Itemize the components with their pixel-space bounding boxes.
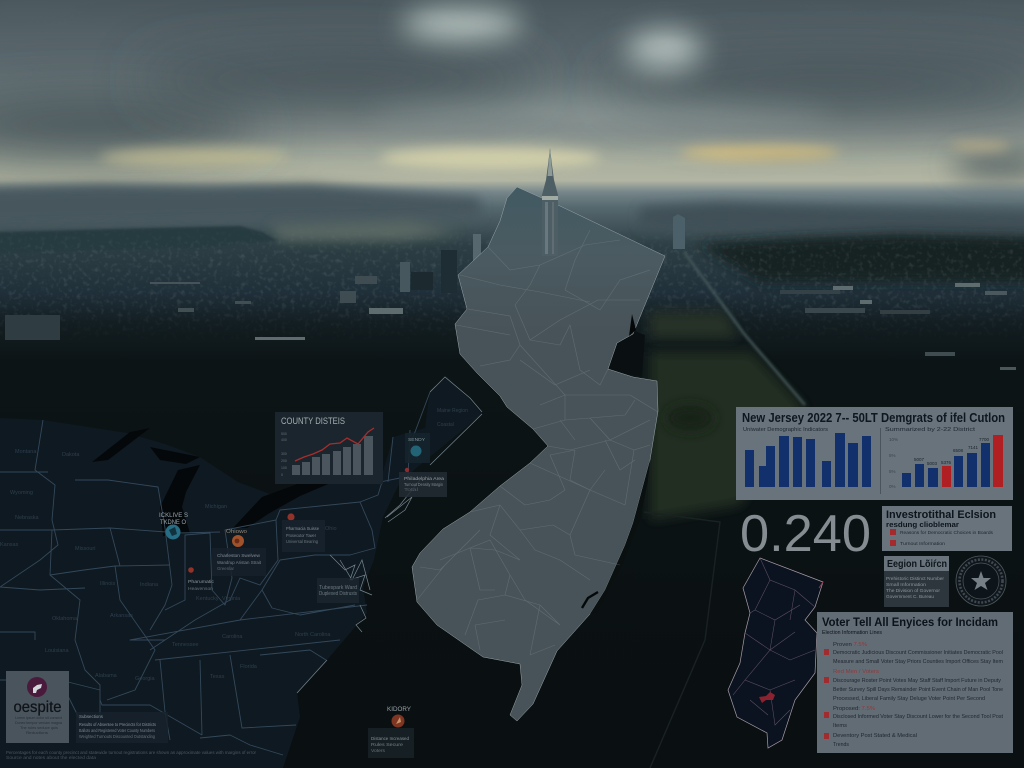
panel: respite logo — [6, 671, 69, 743]
small Maine labels: Coastal — [437, 422, 454, 428]
voter list text: Discourage Roster Point Votes May Staff Staff Import Future in Deputy — [833, 678, 1001, 684]
faint state labels: Montana — [15, 449, 37, 455]
chart divider — [879, 428, 882, 494]
city and fields — [0, 242, 1024, 328]
right chart value labels: 5003 — [927, 461, 938, 466]
map marker and callout: offshore: Distance Increased — [371, 736, 409, 741]
panel: demographics bar charts — [736, 407, 1013, 500]
callout: northeast note — [399, 472, 447, 497]
US regional map, dark navy: Source and notes about the elected data — [6, 755, 96, 761]
voter list text: Measure and Small Voter Stay Priors Counties Import Offices Stay Item — [833, 659, 1003, 665]
map marker and callout: Pennsylvania: Prosecutor Tower — [286, 533, 316, 538]
faint state labels: Alabama — [95, 673, 118, 679]
panel: region legend — [884, 556, 949, 607]
panel: county chart — [275, 412, 383, 484]
right chart value labels: 5% — [889, 453, 896, 458]
right chart value labels: 6508 — [953, 448, 964, 453]
map marker: Ohio — [226, 529, 247, 547]
voter list text: Trends — [833, 742, 849, 748]
faint state labels: Ohio — [325, 526, 337, 532]
footer note: Percentages for each county precinct and statewide turnout registrations are shown as approximate values with margins of error — [6, 750, 256, 756]
faint state labels: Nebraska — [15, 515, 39, 521]
map marker and callout: offshore — [368, 707, 414, 758]
callout: Virginia note — [317, 578, 359, 603]
dark bay behind state — [603, 330, 645, 376]
panel: investigational decision: resdung clioblemar — [886, 520, 959, 529]
skyscraper rising behind the state — [542, 148, 558, 256]
panel: respite logo: Reductions — [26, 731, 48, 735]
map marker and callout: Pennsylvania: Pharmacia Suisse — [286, 526, 319, 531]
map marker: Indiana: Pharumatic — [188, 579, 215, 584]
map marker and callout: Pennsylvania — [282, 513, 325, 552]
big metric: 0.240 — [740, 505, 871, 563]
panel: respite logo: Lorem ipsum dolor sit consect — [15, 716, 62, 720]
county chart red trend line — [295, 428, 374, 461]
panel: respite logo: oespite — [14, 699, 62, 716]
faint state labels: North Carolina — [295, 632, 331, 638]
faint state labels: Missouri — [75, 546, 95, 552]
map marker: Lake Michigan globe — [159, 513, 188, 540]
county chart axis labels — [281, 432, 287, 477]
distant ridge lines — [0, 184, 480, 228]
left chart subtitle: Uniwater Demographic Indicators — [743, 427, 828, 433]
county chart axis labels: 300 — [281, 452, 287, 456]
voter list text: Red Men / Voters — [833, 669, 879, 675]
faint state labels: Illinois — [100, 581, 116, 587]
voter list text: Processed, Liberal Family Stay Deluge Voter Point Per Second — [833, 696, 985, 702]
callout: Virginia note: Duplexed Distrusts — [319, 591, 357, 597]
small New Jersey county map — [728, 558, 823, 748]
right chart value labels: 5376 — [941, 460, 952, 465]
US regional map, dark navy — [0, 377, 482, 768]
faint state labels: Kentucky — [196, 596, 219, 602]
panel: investigational decision: Reasons for Democratic Choices in Boards — [900, 530, 994, 535]
right chart value labels: 5% — [889, 469, 896, 474]
right chart value labels: 10% — [889, 437, 898, 442]
faint state labels: Arkansas — [110, 613, 133, 619]
faint state labels: Oklahoma — [52, 616, 78, 622]
callout: Ohio note — [212, 548, 266, 576]
right chart value labels: 7700 — [979, 437, 990, 442]
panel: voter text — [817, 612, 1013, 753]
New Jersey large county map — [412, 187, 665, 721]
faint state labels: Louisiana — [45, 648, 69, 654]
voter list text: Disclosed Informed Voter Stay Discount Lower for the Second Tool Post — [833, 714, 1004, 720]
highlighted red county — [759, 692, 775, 703]
panel: investigational decision: Turnout Information — [900, 541, 945, 546]
panel: voter text: Election Information Lines — [822, 630, 882, 636]
faint state labels: Florida — [240, 664, 258, 670]
panel: investigational decision — [882, 506, 1012, 551]
lakes — [92, 428, 333, 536]
map marker: northeast — [405, 433, 430, 472]
panel: respite logo: Donec tempor veniam magna — [15, 721, 62, 725]
county chart axis labels: 100 — [281, 466, 287, 470]
callout: Virginia note: Tubespark Ward — [319, 585, 357, 591]
callout: legend text near logo: Ballots and Registered Voter County Numbers — [79, 728, 156, 733]
panel: region legend: Prehistoric Distinct Number — [886, 576, 944, 581]
panel: region legend: Government C. Bureau — [886, 594, 934, 599]
faint state labels: Carolina — [222, 634, 243, 640]
map marker and callout: offshore: KIDORY — [387, 707, 411, 713]
bright rooftops — [150, 276, 1016, 370]
faint state labels: Kansas — [0, 542, 19, 548]
county chart title: COUNTY DISTEIS — [281, 416, 345, 427]
panel: region legend: The Division of Governor — [886, 588, 940, 593]
voter list text: Democratic Judicious Discount Commissioner Initiates Democratic Pool — [833, 650, 1003, 656]
faint state labels: Michigan — [205, 504, 227, 510]
map marker: Indiana — [188, 567, 215, 591]
legend red swatches — [890, 529, 896, 535]
voter list text: Items — [833, 723, 847, 729]
callout: Ohio note: Charleston Swelvew — [217, 553, 261, 559]
county chart axis labels: 200 — [281, 459, 287, 463]
callout: Ohio note: Greenlar — [217, 566, 234, 572]
voter list text — [833, 642, 1004, 748]
callout: Ohio note: Wandrup Aristan Strait — [217, 560, 262, 566]
small Maine labels: Maine Region — [437, 408, 468, 414]
callout: legend text near logo: Subsections — [79, 714, 104, 719]
barnegat inlet — [582, 592, 598, 608]
county chart axis labels: 500 — [281, 432, 287, 436]
voter list text: Proposed: 7.5% — [833, 706, 875, 712]
county chart axis labels: 0 — [281, 473, 283, 477]
faint state labels: Texas — [210, 674, 225, 680]
voter panel title: Voter Tell All Enyices for Incidam — [822, 615, 998, 629]
map marker and callout: Pennsylvania: Universal Bearing — [286, 539, 318, 544]
left bar chart — [745, 433, 871, 487]
faint state labels: Tennessee — [172, 642, 199, 648]
faint state labels — [0, 449, 337, 682]
red bullet markers — [824, 649, 829, 739]
voter list text: Deventory Post Stated & Medical — [833, 733, 917, 739]
panel: respite logo: The rules seduce quis — [20, 726, 58, 730]
county lines — [417, 230, 658, 655]
county chart axis labels: 400 — [281, 438, 287, 442]
right chart subtitle: Summarized by 2-22 District — [885, 427, 976, 433]
voter list text: Better Survey Spill Days Remainder Point Event Chain of Man Pool Tone — [833, 687, 1003, 693]
coast detail — [297, 377, 482, 693]
callout: legend text near logo: Results of Absentee to Precincts for Districts — [79, 722, 157, 727]
panel: investigational decision: Investrotithal Eclsion — [886, 509, 996, 521]
right bar chart — [902, 435, 1003, 487]
map marker: Indiana: Heavenson — [188, 586, 214, 591]
callout: northeast note: Total — [404, 487, 418, 492]
county chart bars — [292, 436, 373, 475]
map marker and callout: offshore: Voters — [371, 748, 386, 753]
right chart value labels: 0% — [889, 484, 896, 489]
right chart value labels — [889, 437, 990, 489]
icon: logo badge — [27, 677, 47, 697]
faint state labels: Indiana — [140, 582, 159, 588]
state borders — [0, 392, 430, 755]
Atlantic coast shadow strip — [590, 460, 650, 614]
map marker: northeast: SENDY — [408, 437, 425, 442]
faint state labels: Virginia — [222, 596, 241, 602]
north bay notch — [629, 314, 636, 336]
small Maine labels — [437, 408, 468, 428]
map marker: Lake Michigan globe: TKDNE O — [160, 520, 186, 526]
icon: state seal — [956, 556, 1006, 606]
map marker and callout: offshore: Rules Secure — [371, 742, 404, 747]
right chart value labels: 5007 — [914, 457, 925, 462]
voter list text: Proven 7.5% — [833, 642, 867, 648]
faint state labels: Georgia — [135, 676, 156, 682]
map marker: Lake Michigan globe: ICKLIVE S — [159, 513, 188, 519]
panel: region legend: Small Information — [886, 582, 926, 587]
callout: northeast note: Philadelphia Area — [404, 476, 445, 481]
callout: legend text near logo — [76, 712, 168, 743]
panel: region legend: Eegion Lõiŕcn — [887, 559, 947, 570]
right chart value labels: 7141 — [968, 445, 979, 450]
callout: legend text near logo: Weighted Turnouts Discounted Outstanding — [79, 734, 155, 739]
map marker: Ohio: Ohiowo — [226, 529, 247, 535]
faint state labels: Wyoming — [10, 490, 33, 496]
callout: northeast note: Turnout Density Margin — [404, 482, 443, 487]
faint state labels: Dakota — [62, 452, 80, 458]
